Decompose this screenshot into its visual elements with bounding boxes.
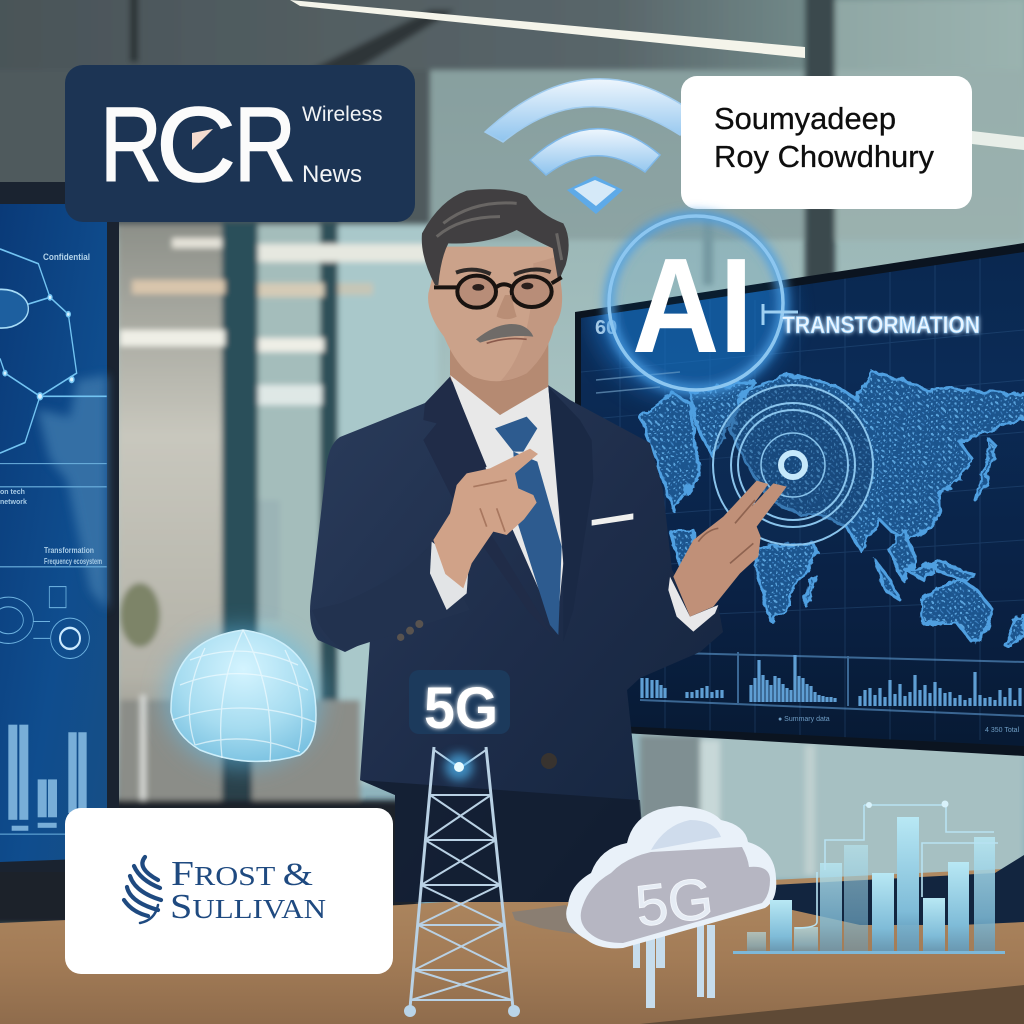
connectors xyxy=(795,805,998,928)
cloud body xyxy=(566,806,776,948)
bar columns xyxy=(8,725,87,831)
left cuff xyxy=(430,542,468,610)
monitor label text: Confidential xyxy=(43,252,90,262)
small tablet on desk xyxy=(512,905,582,935)
screen header text: 60 xyxy=(595,317,617,339)
dashboard corner caption: 4 350 Total xyxy=(985,727,1020,734)
5G cloud xyxy=(566,806,776,1008)
jacket button xyxy=(541,753,557,769)
RCR wordmark: R xyxy=(100,86,162,204)
RCR wordmark xyxy=(100,86,296,204)
left monitor xyxy=(0,182,119,872)
RCR wordmark: C xyxy=(156,86,236,204)
moustache xyxy=(476,324,533,343)
hair xyxy=(422,189,569,285)
neck xyxy=(450,340,548,415)
RCR wordmark: R xyxy=(234,86,296,204)
cloud face xyxy=(581,847,770,943)
name card xyxy=(681,76,972,209)
hologram bar chart xyxy=(733,800,1005,954)
monitor caption line 1: Transformation xyxy=(44,546,94,555)
world map xyxy=(640,372,1024,648)
pointing hand xyxy=(433,449,538,588)
News: News xyxy=(302,161,362,188)
monitor left caption line 2: network xyxy=(0,499,27,506)
desk xyxy=(0,868,1024,1024)
5G sign: 5G xyxy=(424,676,498,741)
beacon xyxy=(445,753,473,781)
screen sub rules xyxy=(596,372,680,393)
kite mark xyxy=(192,129,213,150)
cloud dome xyxy=(651,820,721,850)
trousers shade xyxy=(360,780,643,902)
left lapel xyxy=(423,377,553,637)
swirl emblem xyxy=(124,857,161,923)
sleeve buttons xyxy=(397,620,423,641)
transformation label: TRANSTORMATION xyxy=(782,312,980,339)
Frost &: FROST & xyxy=(171,854,313,893)
nose xyxy=(497,295,517,319)
wifi icon xyxy=(485,79,690,214)
Wireless: Wireless xyxy=(302,103,383,126)
cloud posts xyxy=(633,925,715,1008)
presenter xyxy=(310,189,787,902)
Frost & Sullivan logo card xyxy=(65,808,393,974)
eyebrows xyxy=(456,270,551,275)
right monitor xyxy=(575,220,1024,756)
name line 1: Soumyadeep xyxy=(714,101,896,136)
right lapel xyxy=(548,387,593,642)
target rings xyxy=(713,385,873,545)
monitor caption line 2: Frequency ecosystem xyxy=(44,557,102,566)
AI text: AI xyxy=(632,230,753,381)
head xyxy=(422,189,569,382)
suit jacket xyxy=(310,375,723,902)
5G tower xyxy=(404,670,520,1017)
baseline xyxy=(733,951,1005,954)
mouth xyxy=(487,339,527,343)
orbit diagrams xyxy=(0,464,107,834)
tie xyxy=(495,417,562,635)
AI hologram xyxy=(609,216,980,390)
holographic globe xyxy=(165,628,321,768)
tower lattice xyxy=(410,747,513,1008)
Sullivan: SULLIVAN xyxy=(170,887,326,926)
bars xyxy=(747,817,995,952)
dashboard histograms xyxy=(642,655,1020,706)
right cuff and hand xyxy=(668,481,787,632)
cloud 5G: 5G xyxy=(632,866,717,939)
shirt xyxy=(450,375,563,630)
RCR Wireless News logo card xyxy=(65,65,415,222)
left forearm sleeve xyxy=(312,543,470,650)
glasses xyxy=(434,276,562,308)
network diagram xyxy=(0,249,107,453)
monitor left caption line 1: on tech xyxy=(0,489,25,496)
screen grid xyxy=(581,250,1024,740)
name line 2: Roy Chowdhury xyxy=(714,139,934,174)
dashboard caption: ● Summary data xyxy=(778,716,830,723)
pocket square xyxy=(592,513,633,526)
dashboard lines xyxy=(640,652,1024,716)
laptop on desk xyxy=(770,855,1024,925)
